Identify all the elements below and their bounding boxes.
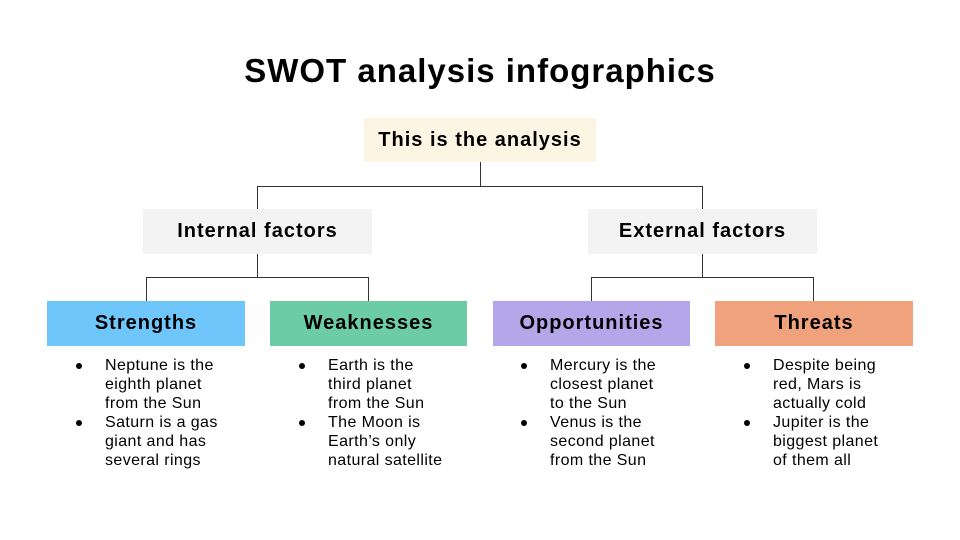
strengths list (76, 357, 218, 469)
strengths header (47, 301, 245, 346)
threats header: Threats (774, 312, 854, 334)
opportunities list: from the Sun (550, 452, 646, 469)
threats list: red, Mars is (773, 376, 861, 393)
threats list: Despite being (773, 357, 876, 374)
opportunities list: closest planet (550, 376, 653, 393)
top box (364, 118, 596, 162)
opportunities header (493, 301, 690, 346)
external factors box: External factors (619, 220, 786, 242)
weaknesses header (270, 301, 467, 346)
threats list: of them all (773, 452, 851, 469)
threats list (744, 357, 878, 469)
opportunities list: to the Sun (550, 395, 627, 412)
strengths list: several rings (105, 452, 201, 469)
opportunities list: Mercury is the (550, 357, 656, 374)
weaknesses list: from the Sun (328, 395, 424, 412)
weaknesses list: natural satellite (328, 452, 442, 469)
threats list: biggest planet (773, 433, 878, 450)
weaknesses list: Earth is the (328, 357, 414, 374)
weaknesses list (299, 357, 442, 469)
weaknesses list: third planet (328, 376, 412, 393)
strengths list: eighth planet (105, 376, 202, 393)
threats list: actually cold (773, 395, 866, 412)
threats header (715, 301, 913, 346)
threats list: Jupiter is the (773, 414, 869, 431)
strengths list: from the Sun (105, 395, 201, 412)
internal factors box: Internal factors (177, 220, 338, 242)
strengths list: Saturn is a gas (105, 414, 218, 431)
strengths list: Neptune is the (105, 357, 214, 374)
external factors box (588, 209, 817, 254)
weaknesses list: Earth’s only (328, 433, 416, 450)
strengths header: Strengths (95, 312, 197, 334)
title: SWOT analysis infographics (244, 52, 716, 89)
opportunities list: second planet (550, 433, 655, 450)
weaknesses list: The Moon is (328, 414, 420, 431)
opportunities list: Venus is the (550, 414, 642, 431)
weaknesses header: Weaknesses (304, 312, 433, 334)
strengths list: giant and has (105, 433, 206, 450)
internal factors box (143, 209, 372, 254)
top box: This is the analysis (378, 128, 582, 150)
opportunities header: Opportunities (519, 312, 664, 334)
opportunities list (521, 357, 656, 469)
